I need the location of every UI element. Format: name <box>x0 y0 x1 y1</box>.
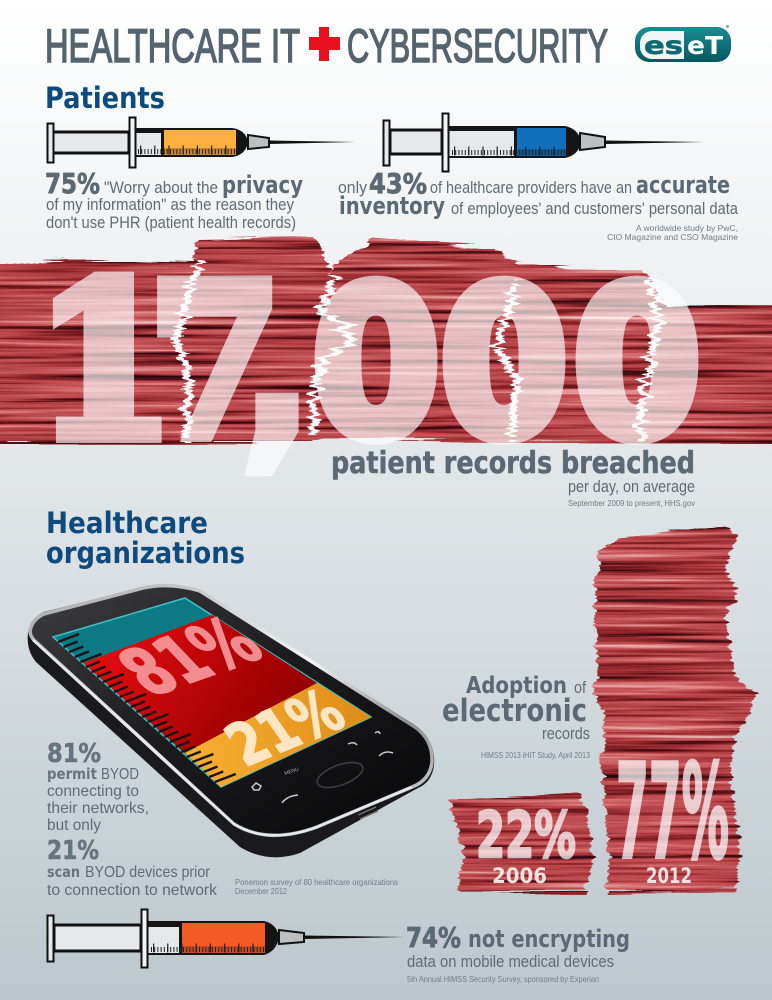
text block: 81% 21% BYOD: connecting to <box>47 783 139 800</box>
text block: patient records breached: September 2009 to present, HHS.gov <box>568 498 696 508</box>
text block: 81% 21% BYOD <box>47 739 218 899</box>
source: PwC study <box>607 223 738 242</box>
text block: adoption of electronic records <box>442 673 590 760</box>
text block: 81% 21% BYOD: 81% <box>47 739 101 769</box>
text block: 81% 21% BYOD: 21% <box>47 836 99 866</box>
logo: ESET: eT <box>687 31 723 60</box>
source: PwC study: A worldwide study by PwC, <box>636 223 738 233</box>
heading: Healthcare organizations <box>46 506 245 570</box>
heading: Healthcare organizations: Healthcare <box>46 506 208 540</box>
text block: patient records breached: patient records breached <box>331 446 695 481</box>
text block: 81% 21% BYOD: BYOD devices prior <box>85 864 211 881</box>
text block: 75% privacy <box>45 167 303 232</box>
text block: 75% privacy: privacy <box>222 171 303 199</box>
big number: 17,000: 7 <box>147 238 283 487</box>
text block: adoption of electronic records: HIMSS 2013 iHIT Study, April 2013 <box>481 750 590 760</box>
source: PwC study: CIO Magazine and CSO Magazine <box>607 232 738 242</box>
text block: 81% 21% BYOD: to connection to network <box>47 882 218 899</box>
text block: 75% privacy: of my information" as the reason they <box>46 196 295 214</box>
scale ticks <box>58 634 236 782</box>
text block: 81% 21% BYOD: but only <box>47 817 101 834</box>
text block: 75% privacy: don't use PHR (patient health records) <box>46 214 296 232</box>
text block: 74% not encrypting: 74% <box>406 921 461 954</box>
text block: 74% not encrypting: data on mobile medical devices <box>407 952 614 971</box>
screen number: 81%: 81% <box>101 604 280 711</box>
source: Ponemon survey <box>235 877 398 896</box>
text block: adoption of electronic records: electronic <box>442 693 587 729</box>
heading: Healthcare organizations: organizations <box>46 536 245 570</box>
phone buttons: MENU <box>284 767 300 777</box>
label: 2006: 2006 <box>492 864 547 888</box>
logo: ESET <box>635 25 731 62</box>
chart: paper stack 2012 <box>595 525 756 892</box>
big number: 17,000 <box>35 223 701 495</box>
big number: 17,000: 0 <box>440 245 568 484</box>
text block: 74% not encrypting: not encrypting <box>468 925 630 953</box>
big number: 17,000: 0 <box>312 245 440 484</box>
text block: adoption of electronic records: records <box>542 724 590 743</box>
big number: 17,000: 1 <box>35 237 175 486</box>
phone face <box>30 586 432 835</box>
phone illustration <box>28 585 434 857</box>
text block: 43% accurate inventory: 43% <box>369 167 427 200</box>
phone buttons <box>252 732 393 819</box>
icon: red plus <box>309 27 340 61</box>
text block: 43% accurate inventory: accurate <box>636 171 730 199</box>
title <box>45 19 608 72</box>
text block: 81% 21% BYOD: permit <box>47 765 97 783</box>
value: 22%: 22% <box>476 799 576 872</box>
screen number: 21%: 21% <box>213 677 357 779</box>
text block: patient records breached: per day, on average <box>568 477 695 496</box>
logo: ESET: es <box>644 31 683 60</box>
screen <box>53 598 371 787</box>
syringe: 43% blue <box>384 114 704 172</box>
text block: 75% privacy: "Worry about the <box>104 178 218 197</box>
text block: adoption of electronic records: of <box>574 678 586 697</box>
title: HEALTHCARE IT <box>45 19 300 72</box>
text block: 43% accurate inventory: inventory <box>339 192 445 220</box>
chart: paper stack 2006 <box>449 793 592 893</box>
label: 2012: 2012 <box>646 864 692 888</box>
syringe: 75% orange <box>48 118 355 168</box>
source: Ponemon survey: Ponemon survey of 80 healthcare organizations <box>235 877 398 887</box>
text block: adoption of electronic records: Adoption <box>466 673 567 699</box>
text block: 75% privacy: 75% <box>45 167 100 200</box>
syringe: 74% orange-red <box>48 910 404 968</box>
heading: Patients: Patients <box>45 81 165 115</box>
paper stack: breached records <box>0 238 772 443</box>
phone body <box>28 585 434 857</box>
text block: 43% accurate inventory: of healthcare providers have an <box>430 178 632 197</box>
text block: 81% 21% BYOD: BYOD <box>101 766 139 783</box>
text block: 74% not encrypting: 5th Annual HIMSS Security Survey, sponsored by Experian <box>407 974 599 984</box>
text block: 43% accurate inventory: of employees' and customers' personal data <box>451 200 739 218</box>
text block: 74% not encrypting <box>406 921 630 984</box>
big number: 17,000: , <box>237 223 317 495</box>
title: CYBERSECURITY <box>347 19 608 72</box>
phone rim highlight <box>33 640 412 835</box>
text block: 43% accurate inventory: only <box>338 178 367 197</box>
source: Ponemon survey: December 2012 <box>235 886 287 896</box>
text block: 43% accurate inventory <box>338 167 739 220</box>
text block: 81% 21% BYOD: their networks, <box>47 800 149 817</box>
big number: 17,000: 0 <box>573 245 701 484</box>
text block: 81% 21% BYOD: scan <box>47 863 80 881</box>
text block: patient records breached <box>331 446 696 508</box>
